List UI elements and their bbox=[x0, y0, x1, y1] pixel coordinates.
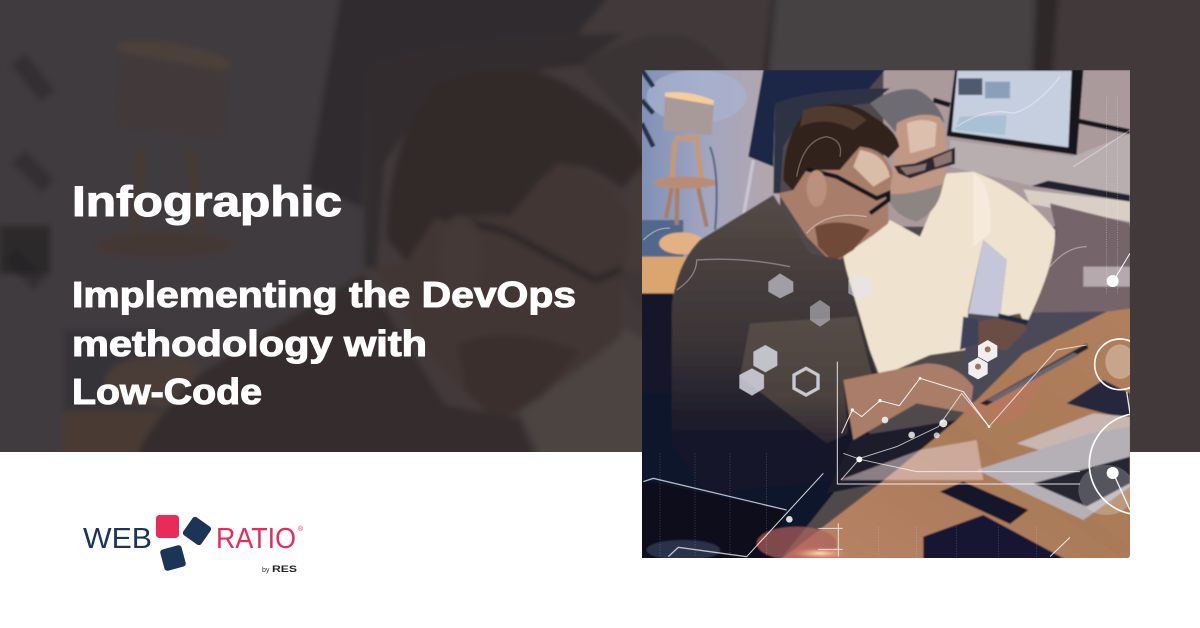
logo: WebRatio by RES: ® bbox=[298, 525, 304, 533]
photo: two developers with a tablet bbox=[642, 70, 1130, 558]
logo: WebRatio by RES bbox=[83, 515, 304, 574]
digital overlay graphics bbox=[643, 76, 1130, 558]
title: Implementing the DevOps methodology with Low-Code: methodology with bbox=[72, 323, 427, 364]
title: Implementing the DevOps methodology with Low-Code: Implementing the DevOps bbox=[72, 274, 576, 315]
logo: WebRatio by RES: WEB bbox=[83, 523, 152, 555]
logo: WebRatio by RES: by bbox=[262, 567, 270, 574]
heading: Infographic: Infographic bbox=[72, 178, 342, 226]
title: Implementing the DevOps methodology with Low-Code bbox=[72, 274, 576, 412]
logo: WebRatio by RES: RATIO bbox=[216, 523, 296, 555]
dark blurred photo banner bbox=[0, 0, 1200, 460]
title: Implementing the DevOps methodology with Low-Code: Low-Code bbox=[72, 371, 262, 412]
logo: WebRatio by RES: RES bbox=[272, 564, 297, 574]
